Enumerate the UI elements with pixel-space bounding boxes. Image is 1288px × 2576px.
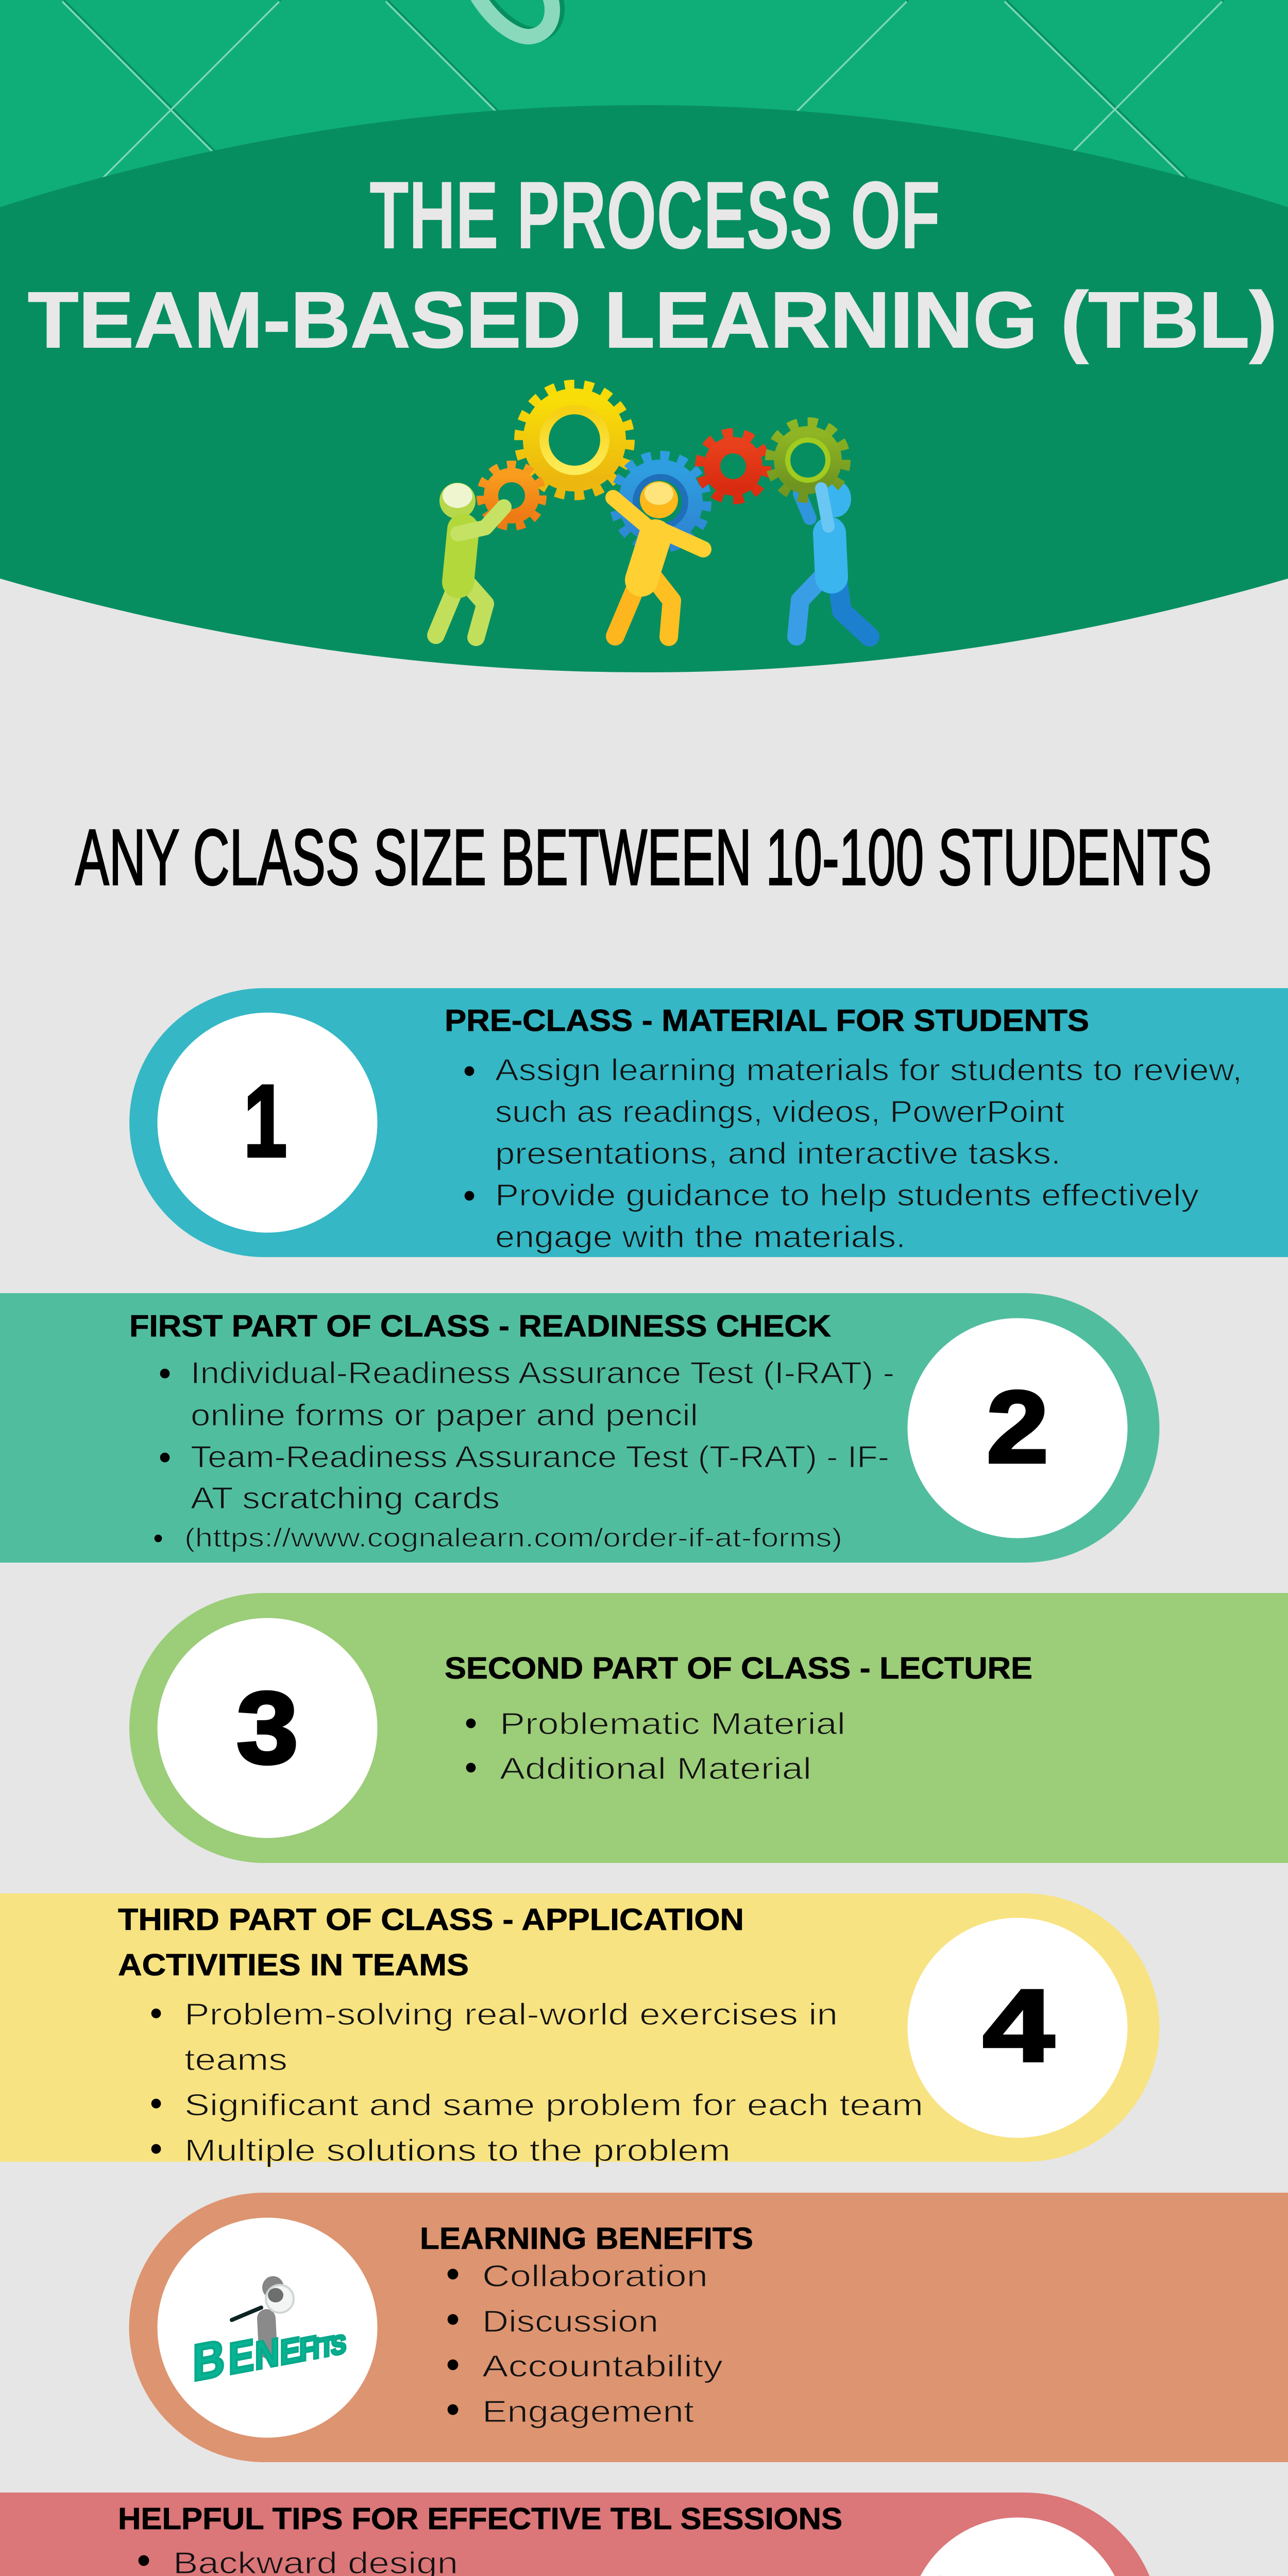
bullet list: such as readings, videos, PowerPoint (495, 1095, 1064, 1129)
bullet list: presentations, and interactive tasks. (495, 1137, 1061, 1171)
icon: benefits figure with magnifier: N (255, 2330, 279, 2378)
heading: SECOND PART OF CLASS - LECTURE (445, 1651, 1032, 1685)
icon: benefits figure with magnifier: I (313, 2332, 319, 2365)
bullet list: online forms or paper and pencil (191, 1398, 698, 1432)
bullet list: engage with the materials. (495, 1220, 906, 1254)
green figure (436, 483, 504, 637)
icon: benefits figure with magnifier: S (331, 2329, 346, 2362)
bullet list: AT scratching cards (191, 1481, 500, 1515)
badge circle (908, 2517, 1127, 2576)
pill background (129, 2193, 1288, 2462)
bullet list (138, 2546, 927, 2576)
bullet list: Provide guidance to help students effectively (495, 1178, 1199, 1212)
bullet list: (https://www.cognalearn.com/order-if-at-forms) (184, 1523, 842, 1552)
icon: benefits figure with magnifier: E (280, 2329, 300, 2372)
bullet list: Multiple solutions to the problem (184, 2133, 731, 2167)
bullet list (447, 2259, 723, 2429)
green gear (770, 422, 846, 498)
bullet list: Assign learning materials for students to review, (495, 1053, 1242, 1087)
panel 6: helpful tips (0, 2493, 1160, 2576)
heading: FIRST PART OF CLASS - READINESS CHECK (129, 1309, 831, 1343)
pill background (129, 988, 1288, 1257)
panel 3: lecture (129, 1593, 1288, 1863)
bullet list: Additional Material (500, 1752, 811, 1786)
badge circle (158, 2217, 377, 2438)
header dark green lens (0, 105, 1288, 672)
number badge 3 (158, 1618, 377, 1838)
number badge 1 (158, 1013, 377, 1232)
panel 1: pre-class (129, 988, 1288, 1257)
number badge 4 (908, 1918, 1127, 2138)
panel 5: learning benefits (129, 2193, 1288, 2462)
bullet list (464, 1053, 1242, 1254)
icon: benefits figure with magnifier: B (193, 2329, 225, 2393)
blue figure (796, 488, 870, 637)
number badge 3: 3 (236, 1671, 298, 1785)
panel 4: application activities (0, 1893, 1159, 2167)
icon: benefits figure with magnifier: E (228, 2330, 254, 2384)
pill background (0, 2493, 1160, 2576)
title line 1: THE PROCESS OF (369, 161, 940, 269)
yellow gear (519, 385, 630, 495)
heading: HELPFUL TIPS FOR EFFECTIVE TBL SESSIONS (118, 2502, 842, 2536)
icon: benefits figure with magnifier (193, 2276, 346, 2393)
number badge 2: 2 (987, 1370, 1048, 1484)
icon: benefits figure with magnifier: T (319, 2330, 334, 2364)
bullet list (466, 1707, 845, 1786)
bullet list: Team-Readiness Assurance Test (T-RAT) - IF- (191, 1440, 889, 1474)
icon: quick tips bulb and frame (914, 2575, 1119, 2576)
panel 2: readiness check (0, 1293, 1160, 1563)
icon: benefits figure with magnifier: F (299, 2329, 316, 2368)
number badge 4: 4 (983, 1969, 1054, 2082)
bullet list: Individual-Readiness Assurance Test (I-RAT) - (191, 1356, 894, 1390)
blue figure back (800, 480, 851, 518)
heading: LEARNING BENEFITS (420, 2222, 753, 2256)
pill background (129, 1593, 1288, 1863)
number badge 2 (908, 1318, 1127, 1538)
number badge 1: 1 (244, 1064, 287, 1178)
bullet list: Significant and same problem for each team (184, 2088, 923, 2122)
header band (0, 0, 1288, 672)
bullet list: Problematic Material (500, 1707, 845, 1741)
bullet list (151, 1997, 923, 2167)
orange gear (481, 465, 543, 527)
heading: THIRD PART OF CLASS - APPLICATION (118, 1903, 744, 1937)
yellow figure (613, 481, 703, 637)
curl decoration (478, 0, 557, 37)
pill background (0, 1893, 1159, 2162)
bullet list: Accountability (482, 2349, 723, 2383)
bullet list: Collaboration (482, 2259, 708, 2293)
blue gear (615, 456, 706, 548)
red gear (700, 433, 767, 500)
pill background (0, 1293, 1160, 1563)
illustration: three figures turning gears (436, 385, 870, 637)
bullet list: Engagement (482, 2395, 694, 2429)
heading line 2: ACTIVITIES IN TEAMS (118, 1948, 469, 1982)
bullet list (154, 1356, 894, 1552)
header light green background (0, 0, 1288, 309)
heading: PRE-CLASS - MATERIAL FOR STUDENTS (445, 1004, 1089, 1038)
bullet list: Problem-solving real-world exercises in (184, 1997, 838, 2031)
bullet list: teams (184, 2043, 287, 2077)
bullet list: Discussion (482, 2304, 658, 2338)
title line 2: TEAM-BASED LEARNING (TBL) (28, 276, 1277, 364)
